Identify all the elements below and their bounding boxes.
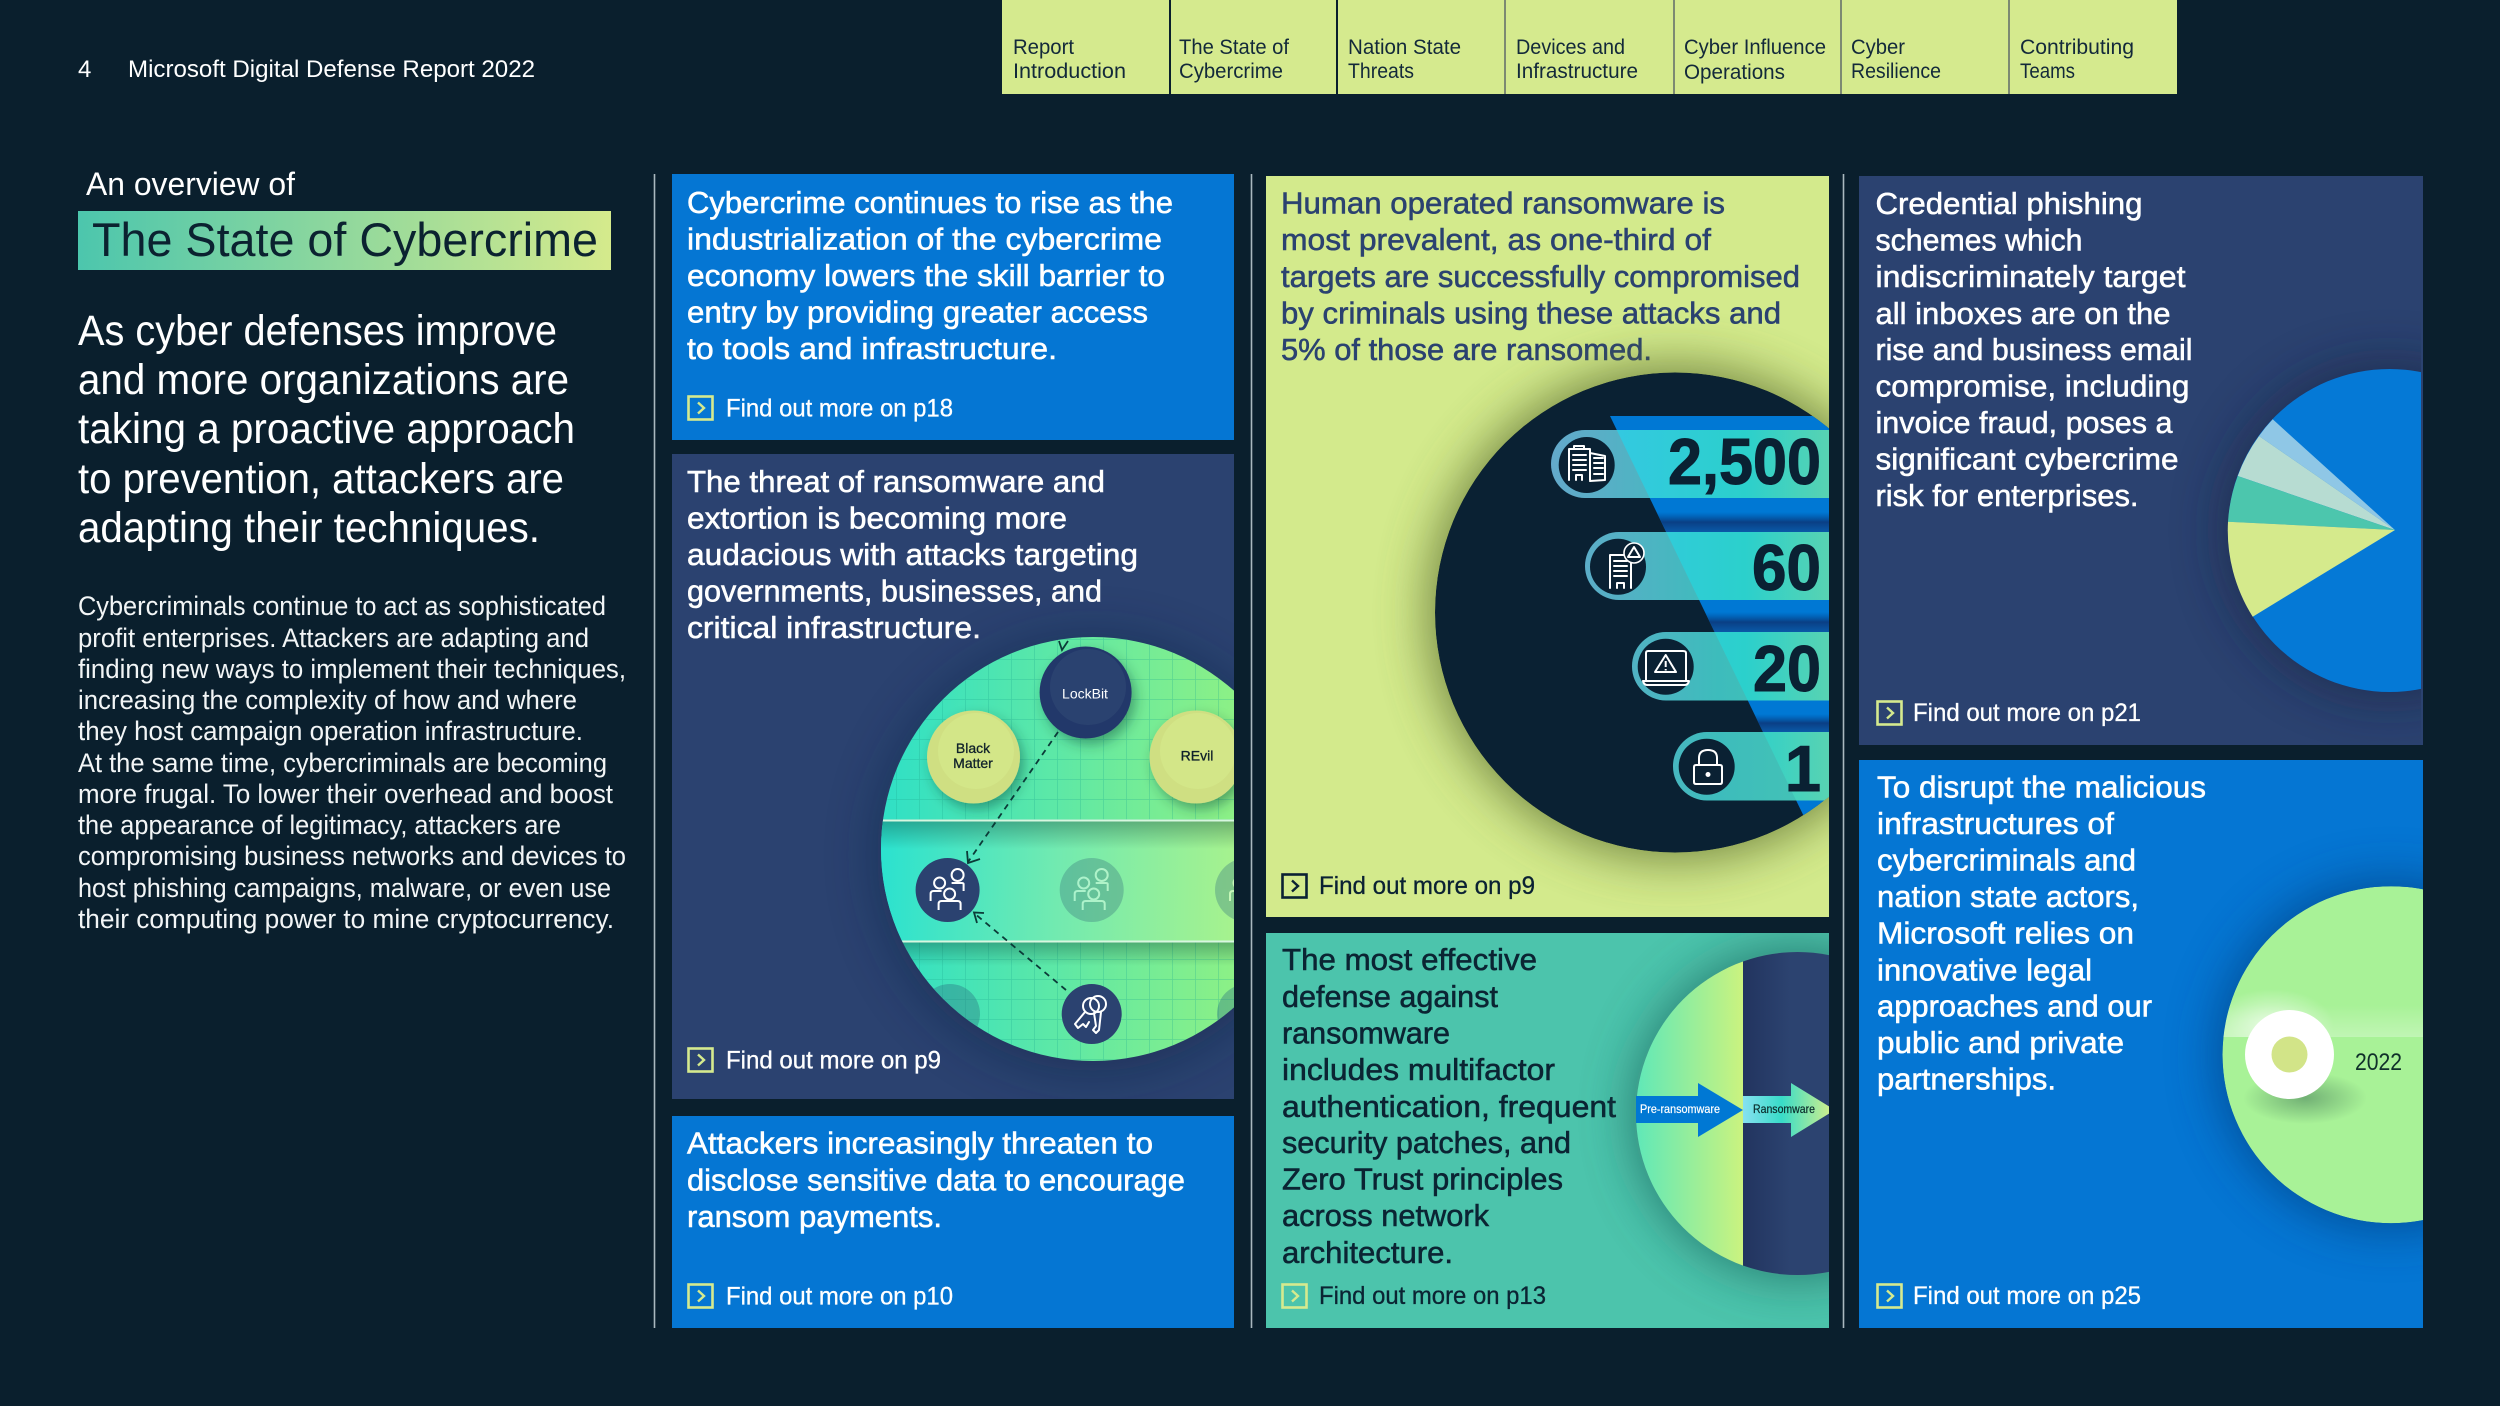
node: affiliates icon — [916, 858, 980, 922]
panel: credential phishing: all inboxes are on the — [1876, 296, 2170, 331]
panel: ransomware and extortion: extortion is becoming more — [687, 501, 1067, 536]
node: LockBit — [1040, 646, 1132, 738]
intro body text: finding new ways to implement their techniques, — [78, 654, 626, 684]
panel: disclosure threats: Attackers increasingly threaten to — [687, 1126, 1153, 1161]
panel: human operated ransomware: by criminals using these attacks and — [1281, 296, 1781, 331]
node: key icon — [1062, 984, 1122, 1044]
timeline disc: 2022 — [2355, 1049, 2402, 1076]
panel: cybercrime industrialization: entry by providing greater access — [687, 294, 1148, 330]
navigation tabs: Report — [1013, 36, 1074, 59]
panel: disrupting infrastructure: cybercriminals and — [1877, 843, 2136, 878]
blue funnel — [1610, 416, 1840, 860]
link: p25: Find out more on p25 — [1913, 1282, 2141, 1310]
intro body text — [78, 591, 626, 934]
panel: credential phishing: schemes which — [1876, 223, 2082, 258]
intro body text: their computing power to mine cryptocurrency. — [78, 904, 614, 934]
link: p18: Find out more on p18 — [726, 394, 953, 422]
panel: disrupting infrastructure: innovative legal — [1877, 952, 2092, 988]
pre-ransomware diagram — [1630, 945, 1962, 1280]
panel: disclosure threats — [672, 1116, 1234, 1328]
navigation tabs: Introduction — [1013, 60, 1126, 83]
panel: effective defense: architecture. — [1282, 1235, 1453, 1270]
stat: 2,500: 2,500 — [1668, 425, 1821, 498]
navigation tabs: Devices and — [1516, 36, 1625, 59]
panel: credential phishing — [1859, 176, 2500, 745]
icon: padlock — [1679, 739, 1735, 795]
timeline disc — [2210, 883, 2500, 1227]
arrow: Pre-ransomware: Pre-ransomware — [1640, 1102, 1720, 1116]
panel: effective defense: across network — [1282, 1198, 1489, 1233]
intro heading: to prevention, attackers are — [78, 456, 564, 503]
panel: cybercrime industrialization: economy lowers the skill barrier to — [687, 258, 1165, 293]
page header: number and report title: Microsoft Digital Defense Report 2022 — [128, 56, 535, 83]
navigation tabs: Cyber — [1851, 36, 1905, 59]
panel: credential phishing: risk for enterprises. — [1876, 478, 2138, 513]
panel: human operated ransomware: most prevalent, as one-third of — [1281, 222, 1711, 257]
link: p21: Find out more on p21 — [1913, 699, 2141, 727]
bar: 60 — [1585, 532, 1905, 600]
intro body text: more frugal. To lower their overhead and boost — [78, 779, 614, 809]
intro body text: At the same time, cybercriminals are becoming — [78, 748, 607, 778]
navigation tabs: Nation State — [1348, 36, 1461, 59]
intro heading: taking a proactive approach — [78, 406, 575, 453]
navigation tabs — [1002, 0, 2177, 94]
panel: disclosure threats: disclose sensitive data to encourage — [687, 1162, 1185, 1197]
panel: human operated ransomware: Human operated ransomware is — [1281, 186, 1725, 221]
panel: ransomware and extortion — [672, 454, 1234, 1099]
panel: disrupting infrastructure: Microsoft relies on — [1877, 916, 2134, 950]
panel: ransomware and extortion: critical infrastructure. — [687, 610, 981, 645]
node: Black Matter: Black — [956, 740, 991, 756]
panel: credential phishing: rise and business email — [1876, 332, 2192, 367]
node: Black Matter: Matter — [953, 755, 993, 771]
overline: An overview of: An overview of — [86, 166, 295, 202]
ghost icons — [934, 858, 1234, 1026]
panel: disclosure threats: ransom payments. — [687, 1199, 942, 1234]
panel: disrupting infrastructure: To disrupt the malicious — [1877, 770, 2206, 804]
panel: effective defense — [1266, 933, 1962, 1328]
panel: credential phishing: Credential phishing — [1876, 186, 2142, 221]
icon: buildings — [1559, 437, 1615, 493]
panel: credential phishing: compromise, including — [1876, 369, 2190, 404]
stat: 1: 1 — [1785, 732, 1821, 805]
panel: human operated ransomware: targets are successfully compromised — [1281, 259, 1800, 294]
node: LockBit: LockBit — [1062, 686, 1108, 702]
year marker — [2245, 1010, 2334, 1099]
panel: human operated ransomware — [1266, 176, 1829, 917]
panel: disrupting infrastructure — [1859, 760, 2500, 1328]
dashed arrows — [967, 641, 1068, 990]
panel: effective defense: The most effective — [1282, 942, 1537, 977]
panel: cybercrime industrialization: Cybercrime continues to rise as the — [687, 185, 1173, 220]
panel: human operated ransomware: 5% of those are ransomed. — [1281, 332, 1652, 367]
intro heading: and more organizations are — [78, 357, 569, 404]
stat: 60: 60 — [1752, 531, 1821, 604]
link: p9: Find out more on p9 — [1319, 872, 1535, 900]
intro heading: As cyber defenses improve — [78, 308, 557, 355]
panel: ransomware and extortion: The threat of ransomware and — [687, 464, 1105, 499]
intro body text: profit enterprises. Attackers are adapting and — [78, 623, 589, 653]
navigation tabs: Contributing — [2020, 36, 2134, 59]
panel: effective defense: security patches, and — [1282, 1125, 1571, 1160]
ransomware funnel circle — [1394, 331, 1829, 894]
intro body text: the appearance of legitimacy, attackers are — [78, 810, 561, 840]
arrow: Ransomware — [1743, 1083, 1835, 1137]
bar: 2,500 — [1551, 430, 1871, 498]
icon: laptop alert — [1638, 639, 1694, 695]
panel: credential phishing: significant cybercrime — [1876, 442, 2178, 476]
arrow: Pre-ransomware — [1636, 1083, 1743, 1137]
bar: 20 — [1632, 632, 1952, 700]
icon: building with alert — [1590, 539, 1646, 595]
intro body text: host phishing campaigns, malware, or even use — [78, 873, 611, 903]
intro heading — [78, 308, 575, 552]
bar: 1 — [1673, 732, 1993, 800]
panel: effective defense: authentication, frequent — [1282, 1089, 1616, 1124]
panel: disrupting infrastructure: partnerships. — [1877, 1062, 2056, 1096]
middle band — [880, 820, 1236, 942]
panel: effective defense: includes multifactor — [1282, 1052, 1555, 1087]
intro body text: increasing the complexity of how and where — [78, 685, 577, 715]
panel: cybercrime industrialization — [672, 174, 1234, 440]
panel: disrupting infrastructure: infrastructures of — [1877, 806, 2114, 841]
navigation tabs: Cybercrime — [1179, 60, 1283, 83]
panel: ransomware and extortion: audacious with attacks targeting — [687, 537, 1138, 572]
panel: effective defense: defense against — [1282, 979, 1498, 1014]
pie chart — [2224, 366, 2500, 696]
link: p13: Find out more on p13 — [1319, 1282, 1546, 1310]
link: p10: Find out more on p10 — [726, 1282, 953, 1310]
title: The State of Cybercrime: The State of Cybercrime — [92, 213, 598, 266]
navigation tabs: Teams — [2020, 60, 2075, 83]
node: REvil — [1150, 710, 1242, 804]
panel: disrupting infrastructure: nation state actors, — [1877, 879, 2139, 914]
intro body text: Cybercriminals continue to act as sophisticated — [78, 591, 606, 621]
intro body text: they host campaign operation infrastructure. — [78, 716, 583, 746]
node: REvil: REvil — [1181, 748, 1213, 764]
navigation tabs: The State of — [1179, 36, 1289, 59]
panel: effective defense: ransomware — [1282, 1016, 1450, 1050]
panel: credential phishing: invoice fraud, poses a — [1876, 405, 2173, 440]
panel: cybercrime industrialization: to tools and infrastructure. — [687, 331, 1057, 366]
panel: effective defense: Zero Trust principles — [1282, 1162, 1563, 1196]
navigation tabs: Infrastructure — [1516, 60, 1638, 83]
navigation tabs: Operations — [1684, 61, 1785, 84]
panel: ransomware and extortion: governments, businesses, and — [687, 574, 1102, 609]
link: p9: Find out more on p9 — [726, 1046, 941, 1074]
intro body text: compromising business networks and devices to — [78, 841, 626, 871]
node: Black Matter — [927, 710, 1020, 804]
panel: credential phishing: indiscriminately target — [1876, 259, 2186, 294]
navigation tabs: Resilience — [1851, 60, 1941, 83]
intro heading: adapting their techniques. — [78, 505, 540, 552]
arrow: Ransomware: Ransomware — [1753, 1102, 1815, 1116]
page header: number and report title: 4 — [78, 56, 91, 83]
panel: disrupting infrastructure: public and private — [1877, 1025, 2124, 1060]
navigation tabs: Threats — [1348, 60, 1414, 83]
panel: disrupting infrastructure: approaches and our — [1877, 989, 2152, 1024]
navigation tabs: Cyber Influence — [1684, 36, 1826, 59]
network diagram circle — [870, 632, 1234, 1078]
panel: cybercrime industrialization: industrialization of the cybercrime — [687, 222, 1162, 256]
stat: 20: 20 — [1753, 632, 1821, 705]
